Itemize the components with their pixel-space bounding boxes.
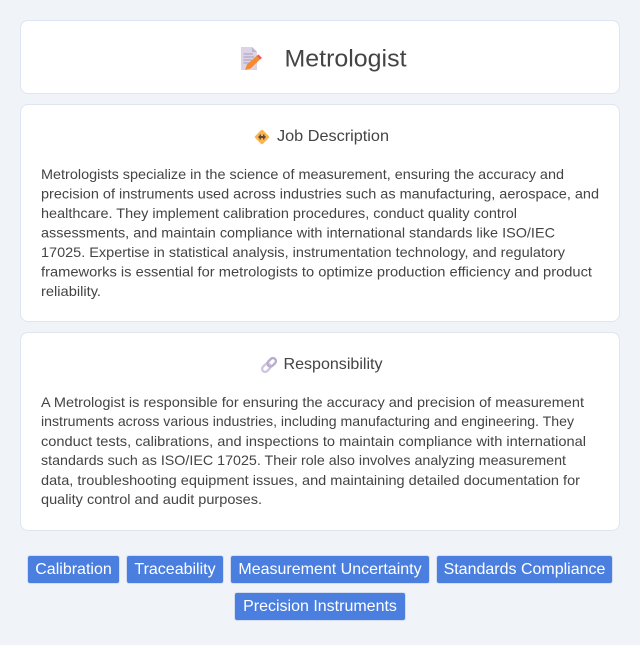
panel: responsibility xyxy=(20,332,620,531)
heading: job description: Job Description xyxy=(277,128,389,145)
responsibility text: A Metrologist is responsible for ensuring the accuracy and precision of measurement xyxy=(41,394,584,410)
tag: Precision Instruments xyxy=(234,592,406,621)
job description text xyxy=(41,166,599,299)
responsibility text: conduct tests, calibrations, and inspections to maintain compliance with international xyxy=(41,433,586,449)
job description text: healthcare. They implement calibration procedures, conduct quality control xyxy=(41,205,517,221)
tag: Calibration: Calibration xyxy=(35,561,112,578)
tag: Standards Compliance xyxy=(436,555,613,584)
responsibility text: instruments across various industries, including manufacturing and engineering. They xyxy=(41,413,574,429)
job description text: 17025. Expertise in statistical analysis, instrumentation technology, and regulatory xyxy=(41,244,565,260)
responsibility text: quality control and audit purposes. xyxy=(41,491,262,507)
heading: responsibility: Responsibility xyxy=(284,356,382,373)
panel: title xyxy=(20,20,620,94)
tag: Precision Instruments: Precision Instruments xyxy=(243,598,397,615)
responsibility text: data, troubleshooting equipment issues, and maintaining detailed documentation for xyxy=(41,472,580,488)
icon: document with pencil xyxy=(241,47,262,70)
tag: Standards Compliance: Standards Compliance xyxy=(444,561,605,578)
tag: Calibration xyxy=(27,555,120,584)
panel: job description xyxy=(20,104,620,322)
job description text: reliability. xyxy=(41,283,101,299)
title text: Metrologist xyxy=(284,46,407,72)
tag: Measurement Uncertainty xyxy=(230,555,430,584)
job description text: assessments, and maintain compliance with international standards like ISO/IEC xyxy=(41,224,555,240)
icon: chain link xyxy=(261,356,278,374)
responsibility text: standards such as ISO/IEC 17025. Their role also involves analyzing measurement xyxy=(41,452,566,468)
icon: diamond sign xyxy=(254,130,270,144)
job description text: frameworks is essential for metrologists to optimize production efficiency and product xyxy=(41,264,592,280)
job description text: Metrologists specialize in the science of measurement, ensuring the accuracy and xyxy=(41,166,564,182)
job description text: precision of instruments used across industries such as manufacturing, aerospace, and xyxy=(41,186,599,202)
tag: Traceability xyxy=(126,555,224,584)
responsibility text xyxy=(41,394,586,507)
tag: Traceability: Traceability xyxy=(134,561,216,578)
tag: Measurement Uncertainty: Measurement Uncertainty xyxy=(238,561,422,578)
